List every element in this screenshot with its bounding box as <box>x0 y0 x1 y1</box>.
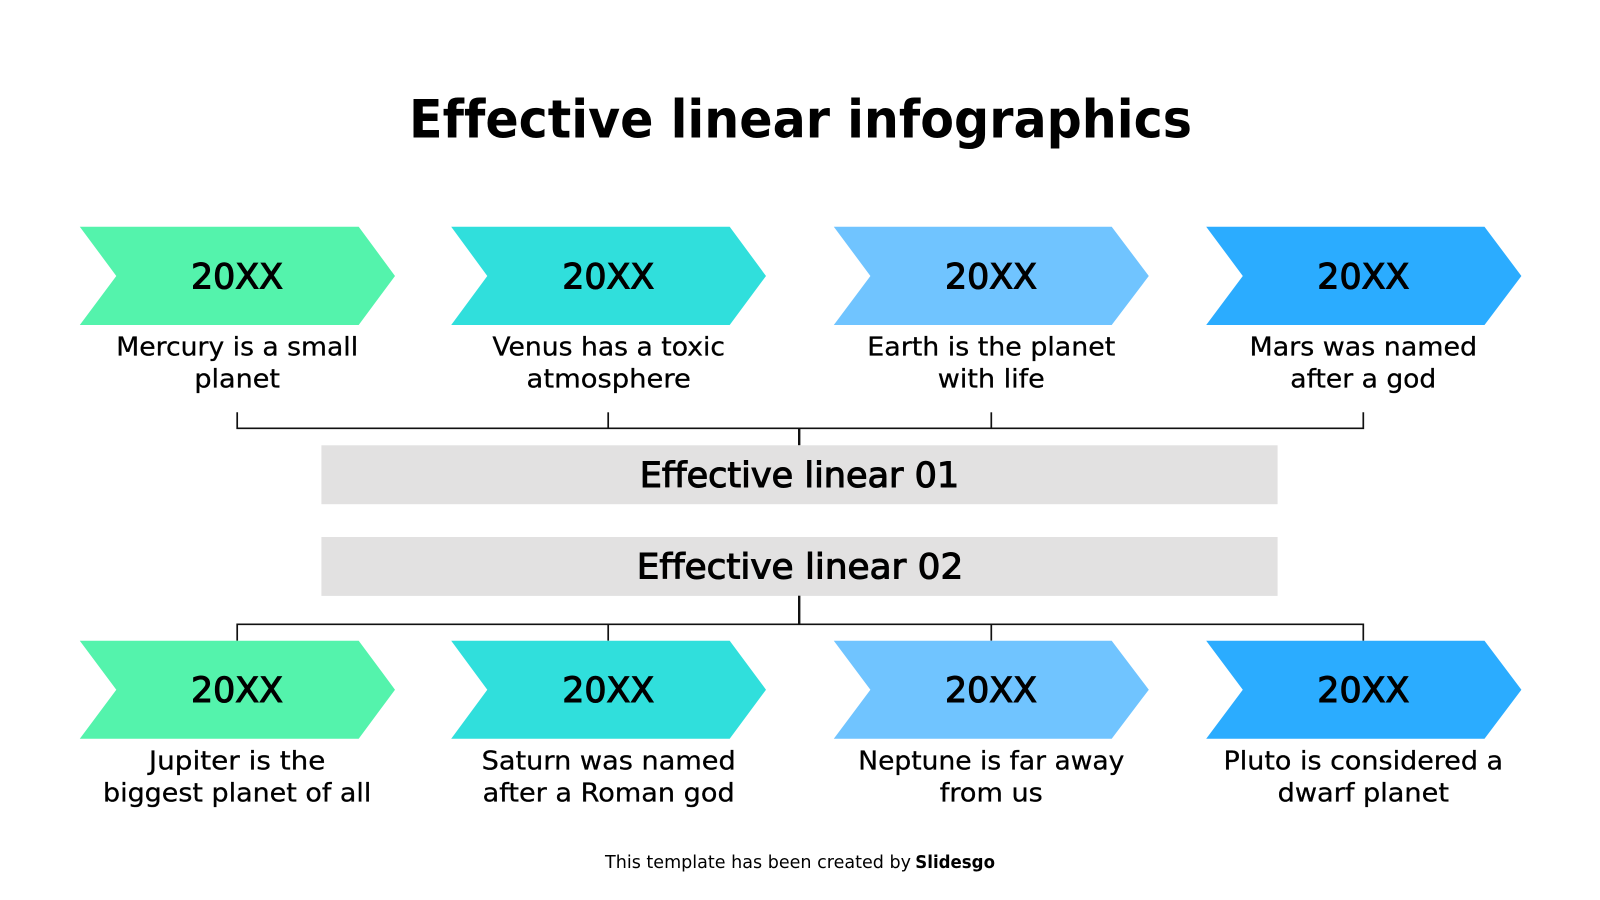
caption: Neptune: from us <box>940 778 1043 808</box>
caption: Neptune <box>858 746 1124 808</box>
arrow: Jupiter <box>80 641 395 739</box>
caption: Mars: after a god <box>1290 364 1436 394</box>
footer credit: This template has been created by <box>604 852 911 873</box>
footer credit: Slidesgo <box>915 852 995 873</box>
arrow: Neptune: 20XX <box>945 671 1037 711</box>
caption: Jupiter: Jupiter is the <box>147 746 325 776</box>
arrow: Pluto: 20XX <box>1317 671 1409 711</box>
arrow: Earth <box>834 227 1149 325</box>
arrow: Jupiter: 20XX <box>191 671 283 711</box>
caption: Earth: Earth is the planet <box>867 332 1115 362</box>
caption: Venus: atmosphere <box>527 364 691 394</box>
caption: Pluto: Pluto is considered a <box>1224 746 1503 776</box>
caption: Mars: Mars was named <box>1250 332 1477 362</box>
caption: Saturn <box>482 746 736 808</box>
arrow: Saturn <box>451 641 766 739</box>
caption: Earth <box>867 332 1115 394</box>
caption: Pluto <box>1224 746 1503 808</box>
title: Effective linear infographics <box>409 90 1192 150</box>
arrow: Mercury <box>80 227 395 325</box>
arrow: Mars: 20XX <box>1317 258 1409 298</box>
caption: Jupiter <box>103 746 371 808</box>
arrow: Mars <box>1206 227 1521 325</box>
arrow: Venus <box>451 227 766 325</box>
arrow: Mercury: 20XX <box>191 258 283 298</box>
arrow: Earth: 20XX <box>945 258 1037 298</box>
caption: Earth: with life <box>938 364 1045 394</box>
bottom row of arrows <box>80 641 1521 808</box>
bar: Effective linear 01 <box>321 445 1278 504</box>
caption: Mercury <box>116 332 358 394</box>
arrow: Pluto <box>1206 641 1521 739</box>
caption: Mercury: Mercury is a small <box>116 332 358 362</box>
caption: Venus <box>492 332 725 394</box>
caption: Mercury: planet <box>194 364 280 394</box>
arrow: Saturn: 20XX <box>562 671 654 711</box>
caption: Jupiter: biggest planet of all <box>103 778 371 808</box>
arrow: Venus: 20XX <box>562 258 654 298</box>
top row of arrows <box>80 227 1521 394</box>
caption: Saturn: after a Roman god <box>483 778 735 808</box>
bar: Effective linear 02 <box>321 537 1278 596</box>
caption: Saturn: Saturn was named <box>482 746 736 776</box>
bottom connector lines <box>237 596 1363 641</box>
caption: Mars <box>1250 332 1477 394</box>
arrow: Neptune <box>834 641 1149 739</box>
bar: Effective linear 01: Effective linear 01 <box>640 456 959 496</box>
top connector lines <box>237 412 1363 445</box>
caption: Neptune: Neptune is far away <box>858 746 1124 776</box>
caption: Pluto: dwarf planet <box>1278 778 1449 808</box>
bar: Effective linear 02: Effective linear 02 <box>637 548 963 588</box>
caption: Venus: Venus has a toxic <box>492 332 725 362</box>
